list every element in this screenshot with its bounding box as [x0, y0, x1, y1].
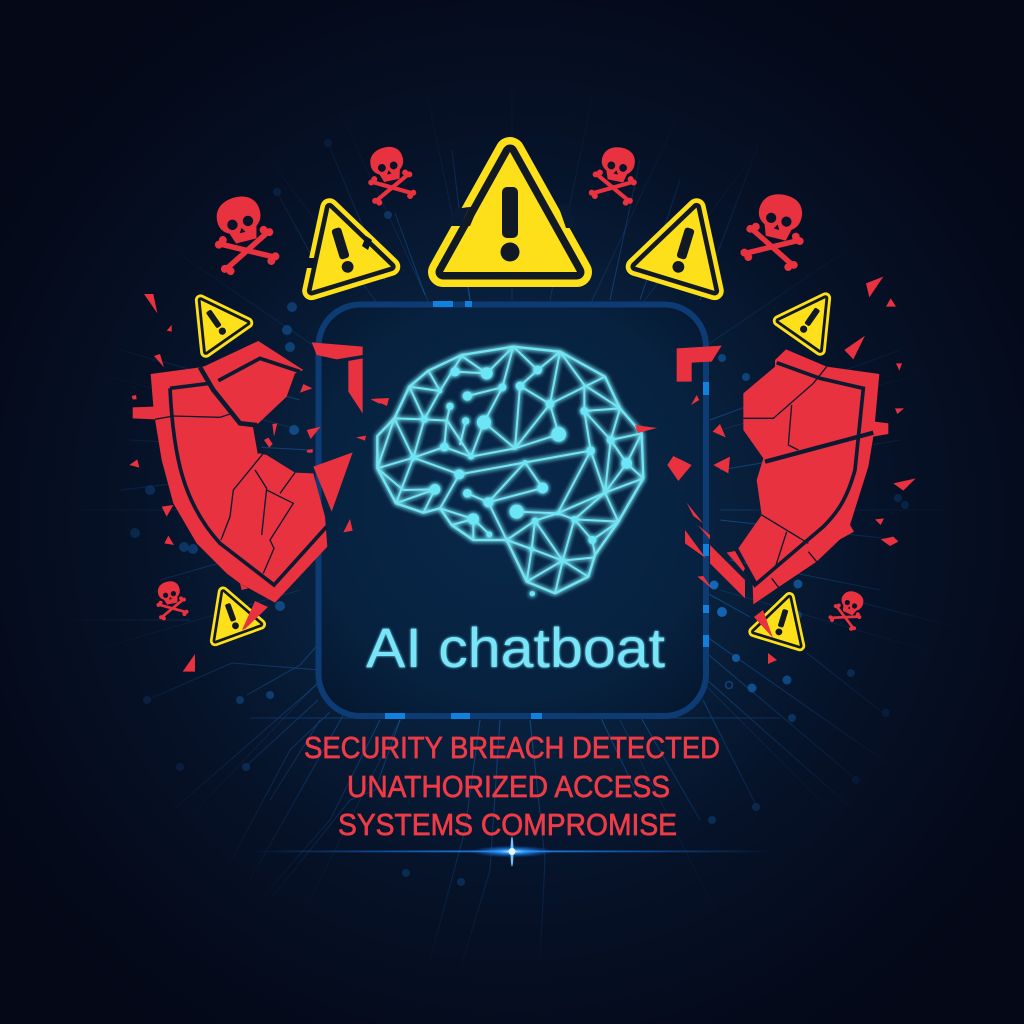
alert line 2: UNATHORIZED ACCESS — [347, 769, 670, 804]
left warning triangle — [290, 195, 391, 291]
brain connections — [377, 347, 643, 593]
upper left small warning triangle — [180, 285, 248, 352]
skull top right — [588, 143, 643, 207]
center warning triangle — [443, 152, 578, 272]
shield body — [133, 341, 327, 603]
skull upper left large — [205, 190, 281, 277]
skull lower left — [152, 579, 189, 621]
shield inner border — [170, 358, 327, 585]
shield thick crack — [765, 433, 873, 462]
shield thin cracks — [155, 414, 295, 573]
brain outline — [377, 347, 643, 593]
alert text — [304, 730, 720, 842]
shield thick crack — [200, 367, 260, 453]
lower left small warning triangle — [200, 584, 268, 641]
panel frame — [318, 304, 706, 716]
skull upper right large — [739, 188, 814, 273]
brain edge shards — [371, 398, 657, 433]
right warning triangle — [635, 195, 736, 291]
shield inner border — [735, 363, 863, 585]
alert line 1: SECURITY BREACH DETECTED — [304, 730, 720, 765]
shield thin cracks — [743, 367, 827, 588]
right broken shield — [735, 349, 888, 604]
frame highlights — [385, 301, 709, 719]
loose shards lower — [768, 653, 777, 664]
skull lower right — [827, 586, 870, 633]
brain nodes — [410, 366, 632, 596]
shield detached shard — [313, 452, 353, 512]
left shards — [129, 294, 380, 672]
brain network — [377, 347, 643, 596]
upper right small warning triangle — [778, 283, 846, 350]
alert line 3: SYSTEMS COMPROMISE — [338, 807, 677, 842]
skull top left — [362, 143, 417, 207]
lower right small warning triangle — [754, 590, 812, 646]
central panel — [318, 301, 709, 719]
background circuit traces and nodes — [82, 107, 942, 958]
panel label: AI chatboat — [366, 616, 665, 679]
left broken shield — [133, 341, 353, 603]
right shards — [667, 277, 916, 598]
shield body — [738, 349, 888, 604]
bottom light flare — [250, 836, 774, 866]
